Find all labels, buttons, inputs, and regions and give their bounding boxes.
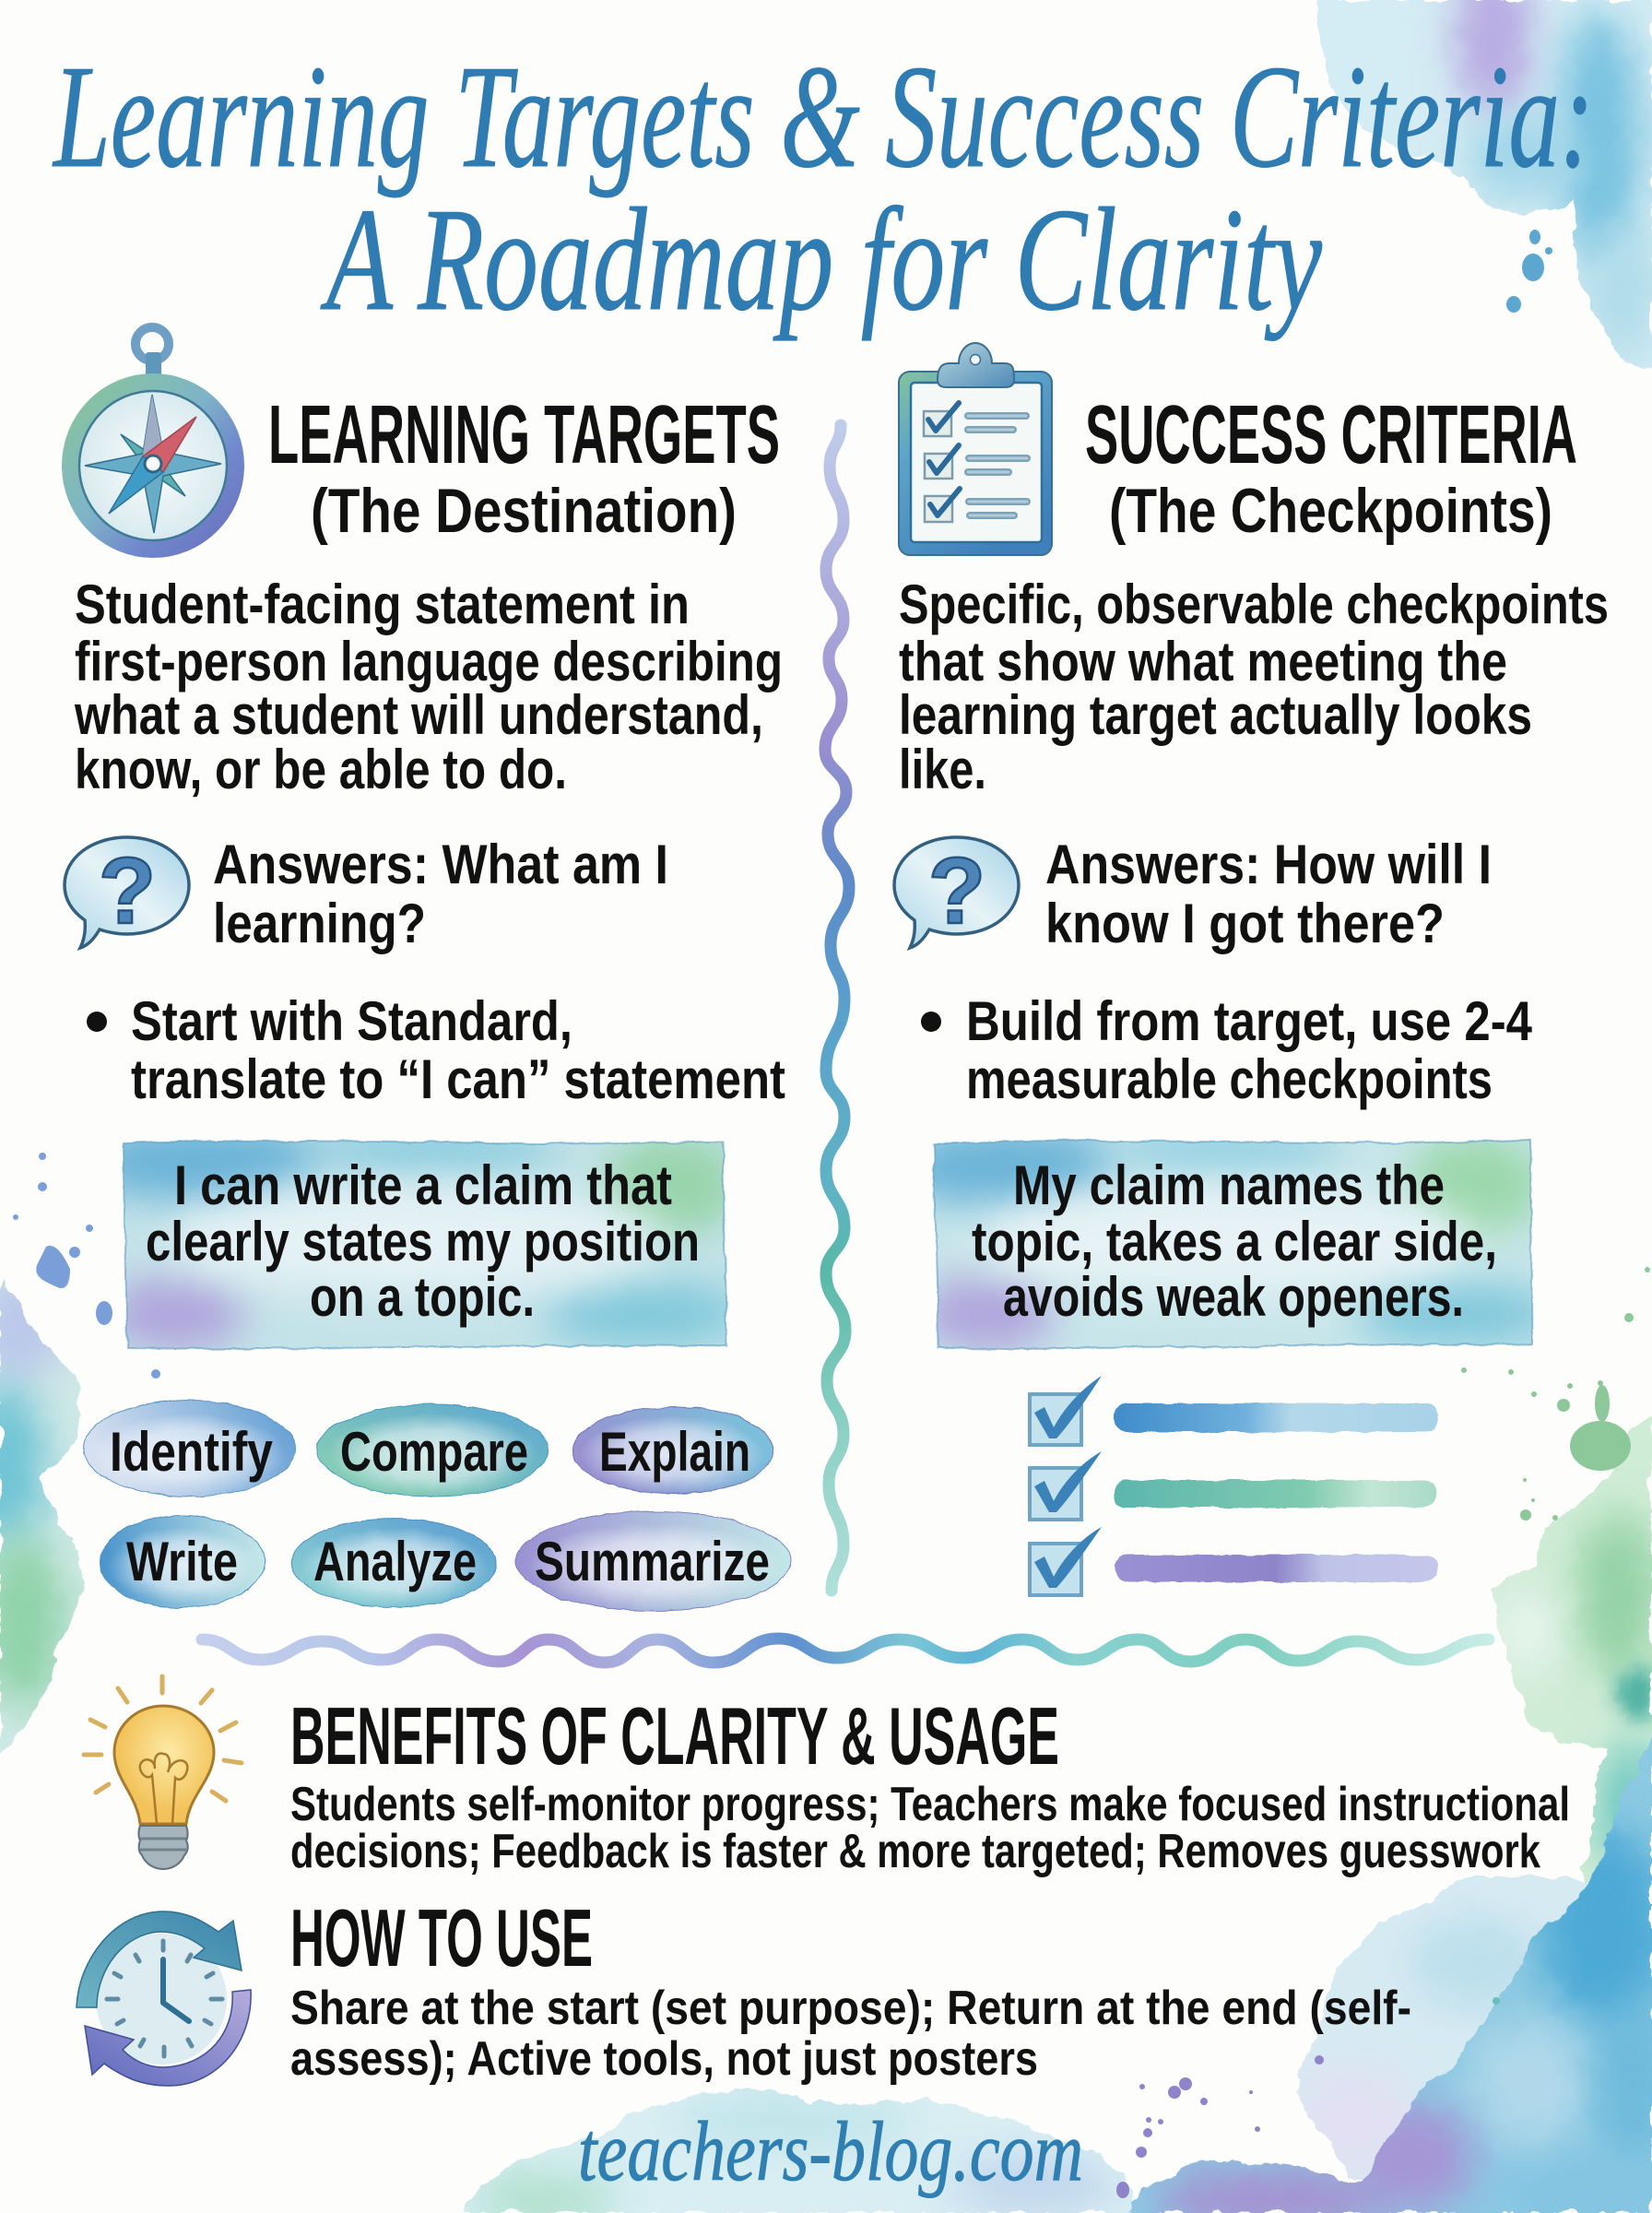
text block: answers: know I got there? (1045, 893, 1445, 954)
text block: answers: Answers: How will I (1045, 834, 1492, 895)
watercolor wash: bottom centre (452, 2084, 1143, 2213)
panel: how to use (77, 1892, 1411, 2086)
pill: write: Write (126, 1531, 238, 1592)
text block: answers (1045, 834, 1492, 954)
pill: compare (317, 1404, 548, 1497)
bullet (87, 990, 785, 1110)
text block: definition: what a student will understand, (74, 684, 763, 746)
callout: success criteria example: avoids weak openers. (1003, 1266, 1464, 1328)
callout: I can statement (122, 1139, 728, 1351)
icon: clipboard (899, 343, 1052, 555)
vertical wavy divider (825, 425, 849, 1591)
checklist graphic (1030, 1376, 1438, 1595)
pill: analyze (291, 1519, 496, 1607)
watercolor wash: bottom right deep (1106, 1724, 1652, 2213)
pill: summarize: Summarize (535, 1531, 770, 1592)
callout: success criteria example: My claim names the (1013, 1154, 1445, 1216)
text block: answers: learning? (213, 893, 426, 954)
bullet: Start with Standard, (131, 990, 572, 1052)
callout: I can statement: I can write a claim that (174, 1154, 672, 1216)
bullet: measurable checkpoints (966, 1048, 1493, 1110)
text block: definition (74, 574, 783, 800)
pill: summarize (516, 1511, 791, 1611)
pill: compare: Compare (340, 1421, 528, 1483)
heading: learning targets: LEARNING TARGETS (268, 389, 780, 481)
callout: success criteria example: topic, takes a clear side, (972, 1211, 1497, 1272)
text block: definition (899, 574, 1609, 800)
horizontal wavy divider (202, 1639, 1489, 1663)
bullet: Build from target, use 2-4 (966, 990, 1533, 1052)
title: A Roadmap for Clarity (320, 177, 1323, 341)
pill: explain (572, 1407, 773, 1494)
verb pills (83, 1401, 791, 1611)
icon: question bubble: ? (928, 838, 985, 943)
text block: definition: like. (899, 739, 986, 800)
icon: clock with arrows (77, 1911, 251, 2086)
text block: benefits (290, 1778, 1570, 1878)
text block: definition: Student-facing statement in (75, 574, 690, 635)
text block: definition: know, or be able to do. (75, 739, 567, 800)
watercolor wash: right green (1492, 1416, 1652, 1885)
pill: identify: Identify (110, 1421, 274, 1483)
title (53, 34, 1594, 341)
text block: definition: first-person language describing (75, 631, 783, 692)
icon: question bubble (65, 837, 189, 948)
text block: how to use: Share at the start (set purpose); Return at the end (self- (290, 1982, 1411, 2035)
subheading: the destination: (The Destination) (311, 476, 737, 546)
text block: definition: that show what meeting the (899, 631, 1507, 692)
text block: definition: learning target actually looks (899, 684, 1532, 746)
icon: question bubble: ? (99, 838, 156, 943)
watercolor wash: top right (1291, 0, 1652, 369)
pill: analyze: Analyze (313, 1531, 477, 1592)
icon: light bulb (84, 1676, 242, 1869)
watercolor wash: left (0, 1279, 85, 1754)
panel: benefits (84, 1676, 1570, 1878)
text block: answers: Answers: What am I (213, 834, 668, 895)
column: learning targets (65, 327, 791, 1611)
text block: how to use (290, 1982, 1411, 2086)
bullet: translate to “I can” statement (131, 1048, 785, 1110)
column: success criteria (894, 343, 1609, 1595)
icon: question bubble (894, 837, 1019, 948)
bullet (921, 990, 1533, 1110)
text block: how to use: assess); Active tools, not just posters (290, 2032, 1038, 2086)
icon: compass (70, 327, 236, 550)
footer: website: teachers-blog.com (578, 2104, 1083, 2198)
subheading: the checkpoints: (The Checkpoints) (1109, 476, 1552, 546)
text block: answers (213, 834, 668, 954)
callout: I can statement: on a topic. (310, 1266, 535, 1328)
pill: explain: Explain (599, 1421, 750, 1483)
callout: success criteria example (932, 1138, 1534, 1351)
heading: how to use: HOW TO USE (290, 1892, 593, 1983)
watercolor wash: bottom right pale (1296, 1874, 1587, 2180)
heading: benefits: BENEFITS OF CLARITY & USAGE (290, 1690, 1059, 1781)
callout: I can statement: clearly states my position (146, 1211, 700, 1272)
pill: write (100, 1516, 265, 1608)
pill: identify (83, 1401, 295, 1497)
